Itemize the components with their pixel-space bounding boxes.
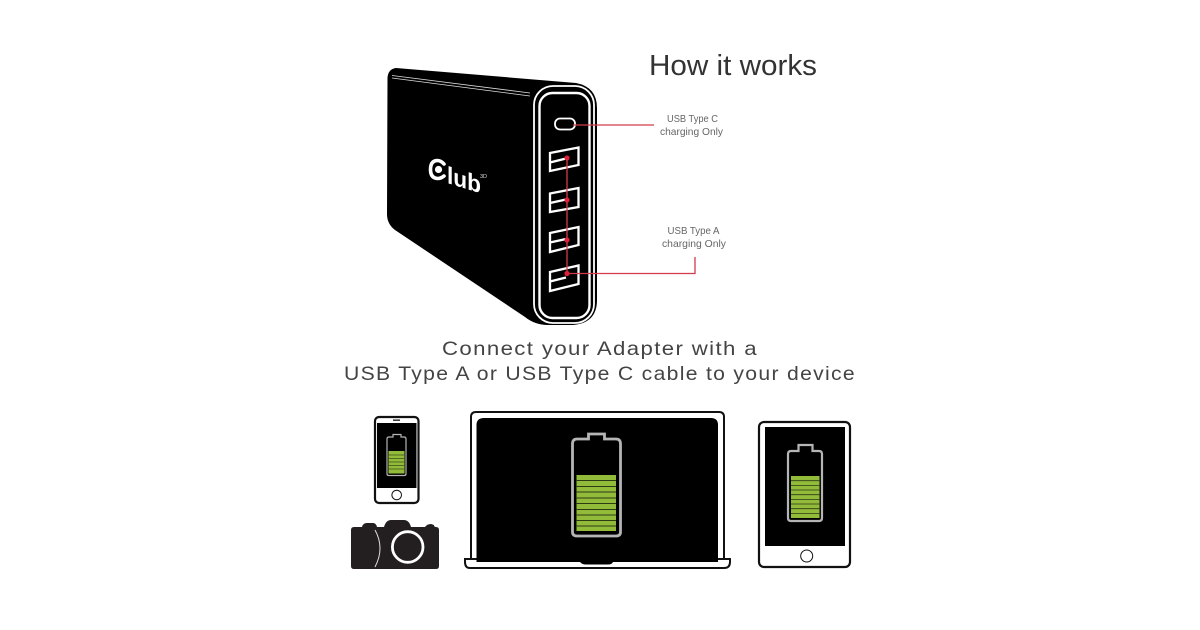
label: USB Type A: charging Only	[662, 238, 727, 250]
instruction text: USB Type A or USB Type C cable to your device	[344, 363, 856, 385]
front panel outline	[534, 86, 594, 323]
USB-A ports	[550, 148, 578, 291]
USB-C port	[555, 118, 575, 130]
red connector lines	[567, 125, 695, 274]
Club 3D logo: 3D	[480, 174, 487, 180]
label: USB Type C: charging Only	[660, 126, 724, 138]
instruction text: Connect your Adapter with a	[442, 338, 758, 360]
top edge highlight	[392, 76, 530, 96]
laptop icon	[465, 412, 730, 568]
tablet battery	[788, 445, 822, 521]
tablet icon	[759, 422, 850, 567]
Club 3D logo: lub	[447, 162, 481, 199]
label: USB Type A: USB Type A	[668, 225, 720, 237]
instruction text	[344, 338, 856, 385]
label: USB Type C	[660, 113, 724, 138]
charger illustration	[387, 68, 695, 325]
camera icon	[351, 520, 439, 569]
title: How it works	[649, 50, 817, 82]
phone battery	[387, 434, 406, 476]
charger body	[387, 68, 597, 325]
label: USB Type C: USB Type C	[667, 113, 718, 125]
label: USB Type A	[662, 225, 727, 250]
Club 3D logo	[430, 160, 487, 199]
smartphone icon	[375, 417, 418, 503]
red connector dots	[564, 155, 570, 276]
laptop battery	[572, 434, 620, 536]
